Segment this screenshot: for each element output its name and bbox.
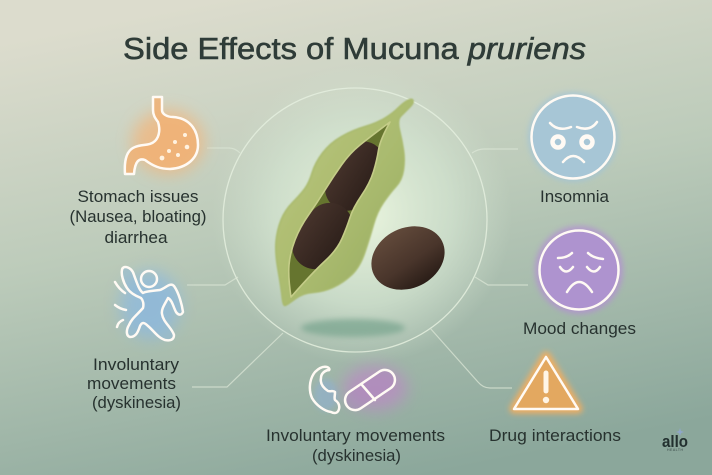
pod [276,99,413,306]
title: Side Effects of Mucuna pruriens [123,31,586,66]
label: involuntary movements: Involuntary movements [266,426,445,445]
icon: stomach [125,97,204,174]
drug interactions item [489,356,621,445]
icon: sad face [535,226,623,314]
logo: allo health: allo [662,432,688,451]
icon: warning triangle [514,356,578,409]
label: stomach issues: Stomach issues [78,187,198,206]
involuntary movements item: bottom [266,366,445,465]
icon: flailing figure [115,267,183,340]
label: drug interactions: Drug interactions [489,426,621,445]
label: mood changes: Mood changes [523,319,636,338]
label: involuntary movements: (dyskinesia) [92,393,181,412]
label: involuntary movements: Involuntary [93,355,180,374]
mood changes item [523,226,636,338]
connector lines [187,148,528,388]
involuntary movements item: left [87,267,183,412]
icon: tired face [528,92,618,182]
label: involuntary movements: movements [87,374,176,393]
stomach item [70,97,206,247]
icon: crescent and capsule [310,366,407,414]
label: stomach issues: diarrhea [104,228,168,247]
ground shadow [301,319,405,337]
insomnia item [528,92,618,206]
label: involuntary movements: (dyskinesia) [312,446,401,465]
label: insomnia: Insomnia [540,187,610,206]
illustration: mucuna pod and seeds [276,99,455,337]
seeds in pod [292,142,378,270]
loose seed [361,214,455,302]
logo: allo health: HEALTH [667,448,683,452]
central circle [223,88,487,352]
label: stomach issues: (Nausea, bloating) [70,207,206,226]
